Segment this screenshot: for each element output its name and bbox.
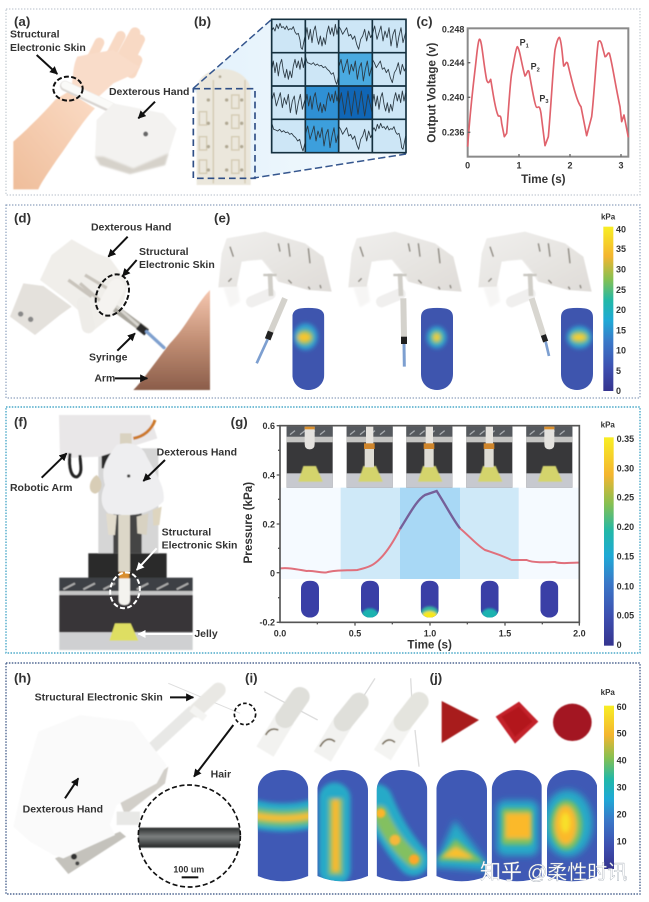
panel g: pressure over time chart: 1.5 bbox=[499, 629, 511, 639]
label: (a) and callouts: Electronic Skin bbox=[10, 43, 86, 54]
panel c: output voltage line chart: (c) bbox=[416, 14, 433, 29]
panel e: three grips with pressure maps: 5 bbox=[616, 366, 621, 376]
panel g: pressure over time chart: 1.0 bbox=[424, 629, 436, 639]
watermark: @柔性时讯 bbox=[527, 861, 627, 884]
panel c: output voltage line chart: Time (s) bbox=[521, 173, 566, 186]
panel f: robotic arm pressing jelly: (f) bbox=[14, 415, 27, 430]
panel j: shape objects and pressure maps: 10 bbox=[617, 836, 627, 846]
panel h: dexterous hand with hair micrograph: Hair bbox=[211, 769, 231, 780]
panel g: pressure over time chart: 2.0 bbox=[573, 629, 586, 639]
panel g: pressure over time chart: 0.10 bbox=[617, 581, 634, 591]
panel g: pressure over time chart: 0.25 bbox=[617, 493, 634, 503]
panel c: output voltage line chart: P bbox=[531, 62, 537, 72]
panel: a, b, c top row bbox=[6, 9, 640, 195]
watermark bbox=[480, 861, 627, 884]
panel d: robot hand with syringe and arm bbox=[10, 211, 215, 390]
panel g: pressure over time chart: 0.05 bbox=[617, 611, 634, 621]
panel g: pressure over time chart: 0.0 bbox=[274, 629, 286, 639]
panel f: robotic arm pressing jelly: Electronic Skin bbox=[162, 541, 237, 552]
panel h: dexterous hand with hair micrograph: 100 um bbox=[173, 864, 204, 874]
panel e: three grips with pressure maps: 15 bbox=[616, 325, 626, 335]
panel e: three grips with pressure maps: 10 bbox=[616, 345, 626, 355]
panel: f, g third row bbox=[6, 407, 640, 653]
panel e: three grips with pressure maps: 25 bbox=[616, 285, 626, 295]
panel b: sensor array and signal grid: (b) bbox=[194, 14, 211, 29]
panel j: shape objects and pressure maps: 30 bbox=[617, 783, 627, 793]
panel e: three grips with pressure maps bbox=[214, 211, 626, 396]
panel j: shape objects and pressure maps: 60 bbox=[617, 702, 627, 712]
panel d: robot hand with syringe and arm: Arm bbox=[94, 373, 115, 384]
panel e: three grips with pressure maps: 40 bbox=[616, 224, 626, 234]
panel c: output voltage line chart: 1 bbox=[526, 43, 529, 49]
panel j: shape objects and pressure maps: 50 bbox=[617, 729, 627, 739]
panel e: three grips with pressure maps: 20 bbox=[616, 305, 626, 315]
panel g: pressure over time chart: 0.5 bbox=[349, 629, 361, 639]
panel g: pressure over time chart: kPa bbox=[601, 420, 615, 429]
panel e: three grips with pressure maps: kPa bbox=[601, 212, 616, 221]
panel j: shape objects and pressure maps bbox=[430, 670, 627, 883]
panel g: pressure over time chart: 0.4 bbox=[262, 470, 275, 480]
panel c: output voltage line chart: 2 bbox=[567, 160, 572, 170]
panel g: pressure over time chart: 0.15 bbox=[617, 552, 634, 562]
panel c: output voltage line chart: 0.248 bbox=[442, 24, 464, 34]
panel: d, e second row bbox=[6, 205, 640, 398]
panel e: three grips with pressure maps: 35 bbox=[616, 244, 626, 254]
panel i: sensors with hair and line pressure maps: (i) bbox=[245, 670, 258, 685]
panel f: robotic arm pressing jelly bbox=[10, 415, 237, 650]
panel g: pressure over time chart: Time (s) bbox=[407, 638, 452, 651]
panel g: pressure over time chart: 0.20 bbox=[617, 522, 634, 532]
panel c: output voltage line chart: 3 bbox=[618, 160, 623, 170]
panel h: dexterous hand with hair micrograph: Dexterous Hand bbox=[23, 804, 103, 815]
panel j: shape objects and pressure maps: 40 bbox=[617, 756, 627, 766]
panel g: pressure over time chart: 0.30 bbox=[617, 463, 634, 473]
panel g: pressure over time chart bbox=[231, 415, 634, 651]
panel c: output voltage line chart: 0.240 bbox=[442, 93, 464, 103]
panel d: robot hand with syringe and arm: Syringe bbox=[89, 353, 128, 364]
panel h: dexterous hand with hair micrograph: (h) bbox=[14, 670, 31, 685]
label: (a) and callouts: Dexterous Hand bbox=[109, 87, 189, 98]
panel d: robot hand with syringe and arm: Structural bbox=[139, 247, 189, 258]
panel c: output voltage line chart: P bbox=[520, 38, 526, 48]
panel b: sensor array and signal grid bbox=[193, 14, 406, 185]
panel d: robot hand with syringe and arm: (d) bbox=[14, 211, 31, 226]
panel c: output voltage line chart: 0 bbox=[465, 160, 470, 170]
panel c: output voltage line chart bbox=[416, 14, 628, 186]
panel f: robotic arm pressing jelly: Robotic Arm bbox=[10, 483, 73, 494]
watermark: 知乎 bbox=[480, 861, 522, 884]
panel g: pressure over time chart: 0.35 bbox=[617, 434, 634, 444]
panel c: output voltage line chart: 3 bbox=[545, 99, 548, 105]
panel c: output voltage line chart: 2 bbox=[537, 67, 540, 73]
panel c: output voltage line chart: 1 bbox=[516, 160, 521, 170]
panel g: pressure over time chart: 0.6 bbox=[262, 421, 275, 431]
panel g: pressure over time chart: Pressure (kPa) bbox=[242, 482, 255, 563]
panel d: robot hand with syringe and arm: Dexterous Hand bbox=[91, 223, 171, 234]
panel g: pressure over time chart: 0 bbox=[270, 568, 275, 578]
panel e: three grips with pressure maps: 0 bbox=[616, 386, 621, 396]
panel e: three grips with pressure maps: 30 bbox=[616, 265, 626, 275]
panel c: output voltage line chart: 0.244 bbox=[442, 58, 464, 68]
panel c: output voltage line chart: 0.236 bbox=[442, 128, 464, 138]
panel i: sensors with hair and line pressure maps bbox=[245, 670, 427, 883]
label: (a) and callouts: (a) bbox=[14, 14, 30, 29]
photo: human arm wearing skin, with dexterous hand bbox=[13, 33, 177, 189]
panel: h, i, j bottom row bbox=[6, 663, 640, 894]
label: (a) and callouts bbox=[10, 14, 189, 118]
panel j: shape objects and pressure maps: 20 bbox=[617, 810, 627, 820]
panel c: output voltage line chart: Output Voltage (v) bbox=[425, 42, 438, 143]
panel h: dexterous hand with hair micrograph: Structural Electronic Skin bbox=[35, 693, 163, 704]
panel g: pressure over time chart: 0 bbox=[617, 640, 622, 650]
panel j: shape objects and pressure maps: (j) bbox=[430, 670, 442, 685]
panel e: three grips with pressure maps: (e) bbox=[214, 211, 230, 226]
panel c: output voltage line chart: P bbox=[539, 93, 545, 103]
panel d: robot hand with syringe and arm: Electronic Skin bbox=[139, 260, 215, 271]
panel g: pressure over time chart: -0.2 bbox=[260, 618, 275, 628]
label: (a) and callouts: Structural bbox=[10, 30, 60, 41]
panel g: pressure over time chart: 0.2 bbox=[262, 519, 275, 529]
panel f: robotic arm pressing jelly: Dexterous Hand bbox=[157, 448, 237, 459]
panel h: dexterous hand with hair micrograph bbox=[13, 670, 256, 887]
panel j: shape objects and pressure maps: kPa bbox=[601, 688, 615, 697]
panel f: robotic arm pressing jelly: Structural bbox=[162, 528, 211, 539]
panel g: pressure over time chart: (g) bbox=[231, 415, 248, 430]
panel f: robotic arm pressing jelly: Jelly bbox=[194, 629, 218, 640]
